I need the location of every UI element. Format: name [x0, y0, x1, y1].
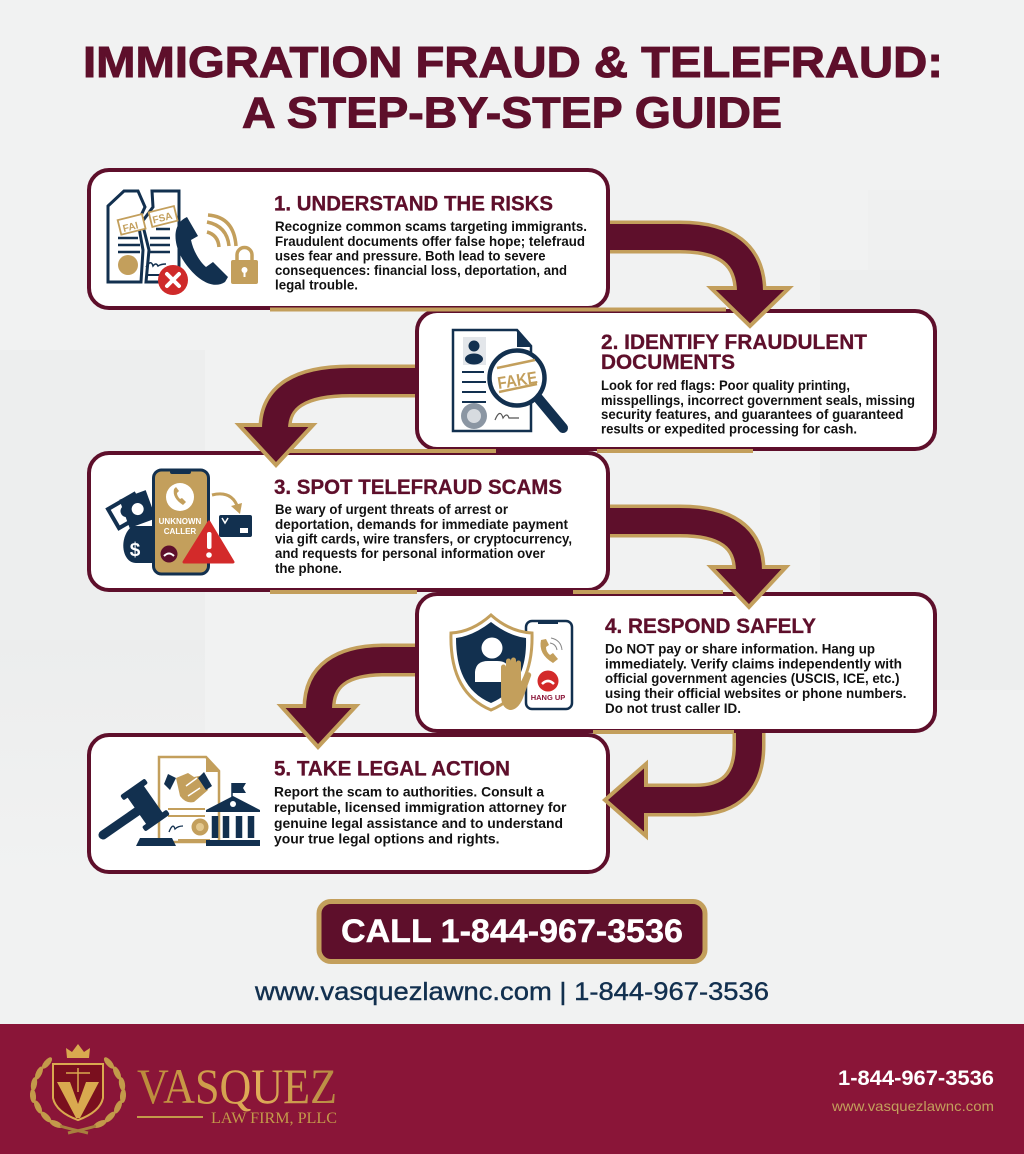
logo: vasquez law firm: VASQUEZ — [137, 1058, 337, 1114]
text block: step 1: legal trouble. — [275, 278, 358, 292]
panel: step 1 understand the risks — [89, 170, 608, 308]
icon: unknown caller phone with cash and warning — [105, 470, 252, 574]
arrow: step 2 to step 3 — [239, 381, 415, 465]
heading: step 5: 5. TAKE LEGAL ACTION — [274, 758, 510, 780]
text block: step 2: results or expedited processing for cash. — [601, 422, 857, 436]
arrow: step 4 to step 5 return — [605, 733, 749, 836]
icon: fake document under magnifier: FAKE — [496, 368, 539, 393]
icon: torn fake document, phone and lock: FAI — [122, 220, 140, 235]
call button: CALL 1-844-967-3536 — [341, 913, 683, 949]
heading: step 2: DOCUMENTS — [601, 351, 735, 374]
icon: shield with hand and hang-up phone — [451, 615, 572, 710]
panel: step 4 respond safely — [417, 594, 935, 731]
text block: step 1 — [275, 219, 587, 292]
contact line: www.vasquezlawnc.com | 1-844-967-3536 — [254, 978, 769, 1006]
arrow: step 4 to step 5 — [281, 660, 415, 747]
panel: step 5 take legal action — [89, 735, 608, 872]
icon: gavel, handshake document and courthouse — [103, 757, 260, 846]
icon: torn fake document, phone and lock: FSA — [152, 211, 174, 226]
panel: step 2 identify fraudulent documents — [417, 311, 935, 449]
text block: step 1: Fraudulent documents offer false hope; telefraud — [275, 234, 585, 249]
text block: step 3 — [275, 502, 572, 576]
logo: vasquez law firm — [29, 1044, 337, 1133]
text block: step 3: and requests for personal information over — [275, 546, 546, 561]
text block: step 2: Look for red flags: Poor quality printing, — [601, 378, 850, 393]
text block: step 4: using their official websites or phone numbers. — [605, 686, 906, 701]
text block: step 5: genuine legal assistance and to understand — [274, 816, 563, 831]
heading: step 2: 2. IDENTIFY FRAUDULENT — [601, 331, 867, 354]
text block: step 3: deportation, demands for immediate payment — [275, 517, 568, 532]
emblem: crest with crown and wreath — [29, 1044, 127, 1133]
text block: step 4: Do NOT pay or share information. Hang up — [605, 642, 875, 656]
text block: step 2: security features, and guarantees of guaranteed — [601, 407, 904, 422]
text block: step 4 — [605, 642, 906, 716]
text block: step 5: your true legal options and rights. — [274, 832, 500, 846]
panel: step 3 spot telefraud scams — [89, 453, 608, 590]
gold border accents between cards — [270, 308, 753, 734]
heading: step 4: 4. RESPOND SAFELY — [605, 615, 816, 638]
text block: step 4: Do not trust caller ID. — [605, 701, 741, 716]
text block: step 1: consequences: financial loss, deportation, and — [275, 263, 567, 278]
call button — [319, 902, 705, 962]
text block: step 3: the phone. — [275, 561, 342, 576]
text block: step 1: Recognize common scams targeting immigrants. — [275, 219, 587, 234]
title: IMMIGRATION FRAUD & TELEFRAUD: — [83, 38, 943, 87]
text block: step 5: Report the scam to authorities. Consult a — [274, 784, 544, 800]
icon: torn fake document, phone and lock — [108, 191, 258, 295]
logo: vasquez law firm: LAW FIRM, PLLC — [211, 1110, 337, 1127]
arrow: step 1 to step 2 — [610, 237, 789, 326]
text block: step 3: via gift cards, wire transfers, or cryptocurrency, — [275, 532, 572, 546]
text block: step 5 — [274, 784, 567, 846]
footer phone: 1-844-967-3536 — [838, 1067, 994, 1090]
text block: step 1: uses fear and pressure. Both lead to severe — [275, 248, 546, 264]
text block: step 4: official government agencies (USCIS, ICE, etc.) — [605, 671, 900, 686]
heading: step 2 — [601, 331, 867, 374]
title — [83, 38, 943, 138]
icon: fake document under magnifier — [453, 330, 563, 431]
footer website: www.vasquezlawnc.com — [831, 1098, 994, 1114]
text block: step 3: Be wary of urgent threats of arrest or — [275, 502, 509, 517]
heading: step 1: 1. UNDERSTAND THE RISKS — [274, 192, 553, 216]
text block: step 5: reputable, licensed immigration attorney for — [274, 800, 567, 815]
title: A STEP-BY-STEP GUIDE — [242, 88, 782, 138]
arrow: step 3 to step 4 — [610, 521, 786, 607]
icon: unknown caller phone with cash and warning: CALLER — [164, 527, 196, 536]
heading: step 3: 3. SPOT TELEFRAUD SCAMS — [274, 476, 562, 499]
text block: step 2 — [601, 378, 915, 436]
icon: unknown caller phone with cash and warning: UNKNOWN — [159, 517, 202, 526]
text block: step 2: misspellings, incorrect government seals, missing — [601, 393, 915, 408]
icon: unknown caller phone with cash and warning: $ — [130, 540, 141, 561]
text block: step 4: immediately. Verify claims independently with — [605, 656, 902, 672]
icon: shield with hand and hang-up phone: HANG UP — [531, 693, 565, 702]
footer band — [0, 1024, 1024, 1154]
